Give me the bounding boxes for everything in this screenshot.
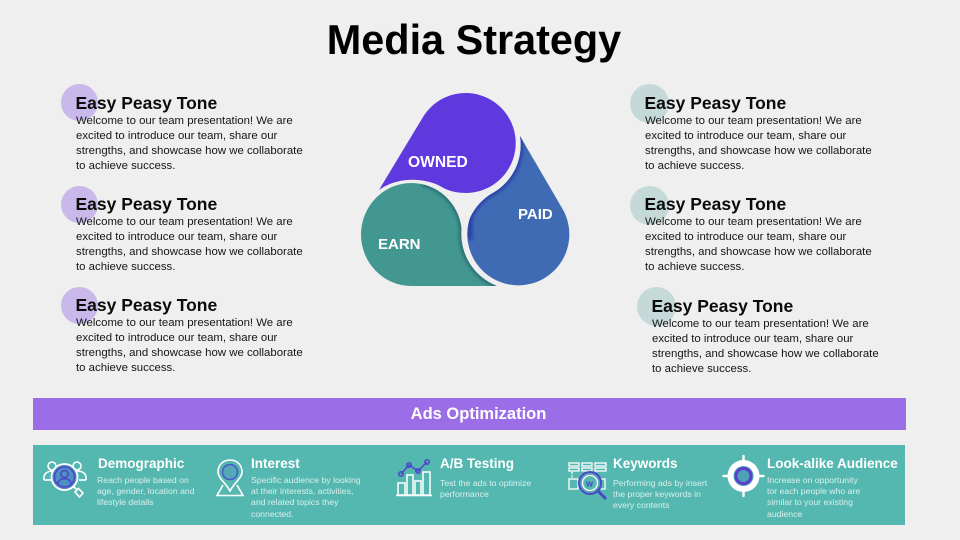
heading: A/B Testing — [440, 456, 514, 471]
description: Reach people based on — [97, 475, 189, 485]
description — [97, 475, 195, 507]
description: connected. — [251, 509, 294, 519]
item: interest — [216, 456, 361, 519]
description — [251, 475, 361, 519]
text block: right 2: Easy Peasy Tone — [644, 194, 786, 214]
text block: right 1 — [630, 84, 872, 172]
description: audience — [767, 509, 802, 519]
text block: left 2: Easy Peasy Tone — [76, 194, 217, 214]
text block: right 3: Easy Peasy Tone — [652, 296, 793, 316]
item: demographic — [43, 456, 195, 507]
description: and related topics they — [251, 497, 338, 507]
diagram: owned paid earn teardrops — [361, 93, 570, 286]
description — [440, 478, 531, 499]
item: look-alike audience — [722, 454, 898, 519]
icon: demographic audience — [43, 461, 87, 498]
text block: left 1 — [61, 84, 303, 172]
text block: left 3: excited to introduce our team, share our — [76, 332, 277, 344]
text block: left 1: Welcome to our team presentation! We are — [76, 115, 293, 127]
description: age, gender, location and — [97, 486, 195, 496]
text block: right 2: to achieve success. — [645, 261, 744, 273]
teardrop: paid — [467, 136, 569, 285]
text block: right 2 — [630, 186, 872, 273]
description: Performing ads by insert — [613, 478, 707, 488]
text block: right 3: strengths, and showcase how we collaborate — [652, 348, 879, 360]
text block: right 3: Welcome to our team presentation! We are — [652, 318, 869, 330]
text block: left 2: to achieve success. — [76, 261, 175, 273]
heading: Look-alike Audience — [767, 456, 898, 471]
text block: left 1: excited to introduce our team, share our — [76, 130, 277, 142]
title: Media Strategy — [327, 17, 621, 63]
label: earn: EARN — [378, 236, 421, 253]
text block: left 3: strengths, and showcase how we collaborate — [76, 347, 303, 359]
description: at their interests, activities, — [251, 486, 353, 496]
text block: left 3: Easy Peasy Tone — [76, 295, 217, 315]
text block: left 1: to achieve success. — [76, 160, 175, 172]
heading: Interest — [251, 456, 300, 471]
text block: right 1: Welcome to our team presentation! We are — [645, 115, 862, 127]
icon: target — [722, 454, 765, 498]
icon: keyword search: w — [585, 478, 594, 488]
text block: left 1: Easy Peasy Tone — [76, 93, 217, 113]
icon: keyword search — [568, 462, 607, 500]
icon: location pin — [216, 459, 244, 496]
heading: Keywords — [613, 456, 678, 471]
text block: right 1: to achieve success. — [645, 160, 744, 172]
icon: chart — [396, 459, 432, 496]
description: the proper keywords in — [613, 489, 701, 499]
banner: ads optimization — [33, 398, 906, 430]
text block: right 1: strengths, and showcase how we collaborate — [645, 145, 872, 157]
description: performance — [440, 489, 489, 499]
banner: ads optimization: Ads Optimization — [411, 405, 546, 423]
description: Specific audience by looking — [251, 475, 361, 485]
teardrop: earn — [361, 183, 497, 286]
teardrop: owned — [379, 93, 516, 193]
text block: right 3 — [637, 287, 879, 375]
text block: right 3: excited to introduce our team, share our — [652, 333, 853, 345]
text block: left 3: Welcome to our team presentation! We are — [76, 317, 293, 329]
text block: left 3: to achieve success. — [76, 362, 175, 374]
description: Test the ads to optimize — [440, 478, 531, 488]
text block: left 2 — [61, 186, 303, 273]
text block: left 3 — [61, 287, 303, 374]
label: paid: PAID — [518, 206, 553, 223]
heading: Demographic — [98, 456, 184, 471]
text block: right 2: strengths, and showcase how we collaborate — [645, 246, 872, 258]
text block: right 1: Easy Peasy Tone — [644, 93, 786, 113]
label: owned: OWNED — [408, 154, 468, 171]
item: keywords — [568, 456, 708, 510]
text block: right 2: excited to introduce our team, share our — [645, 231, 846, 243]
description: tor each people who are — [767, 486, 860, 496]
text block: right 3: to achieve success. — [652, 363, 751, 375]
text block: left 2: excited to introduce our team, share our — [76, 231, 277, 243]
text block: left 1: strengths, and showcase how we collaborate — [76, 145, 303, 157]
item: a/b testing — [396, 456, 531, 499]
description: similar to your existing — [767, 497, 853, 507]
description — [767, 475, 860, 519]
description — [613, 478, 708, 510]
text block: left 2: strengths, and showcase how we collaborate — [76, 246, 303, 258]
panel: ads strip — [33, 445, 905, 525]
description: Increase on opportunity — [767, 475, 858, 485]
text block: left 2: Welcome to our team presentation! We are — [76, 216, 293, 228]
text block: right 1: excited to introduce our team, share our — [645, 130, 846, 142]
description: every contents — [613, 500, 670, 510]
text block: right 2: Welcome to our team presentation! We are — [645, 216, 862, 228]
description: lifestyle details — [97, 497, 154, 507]
